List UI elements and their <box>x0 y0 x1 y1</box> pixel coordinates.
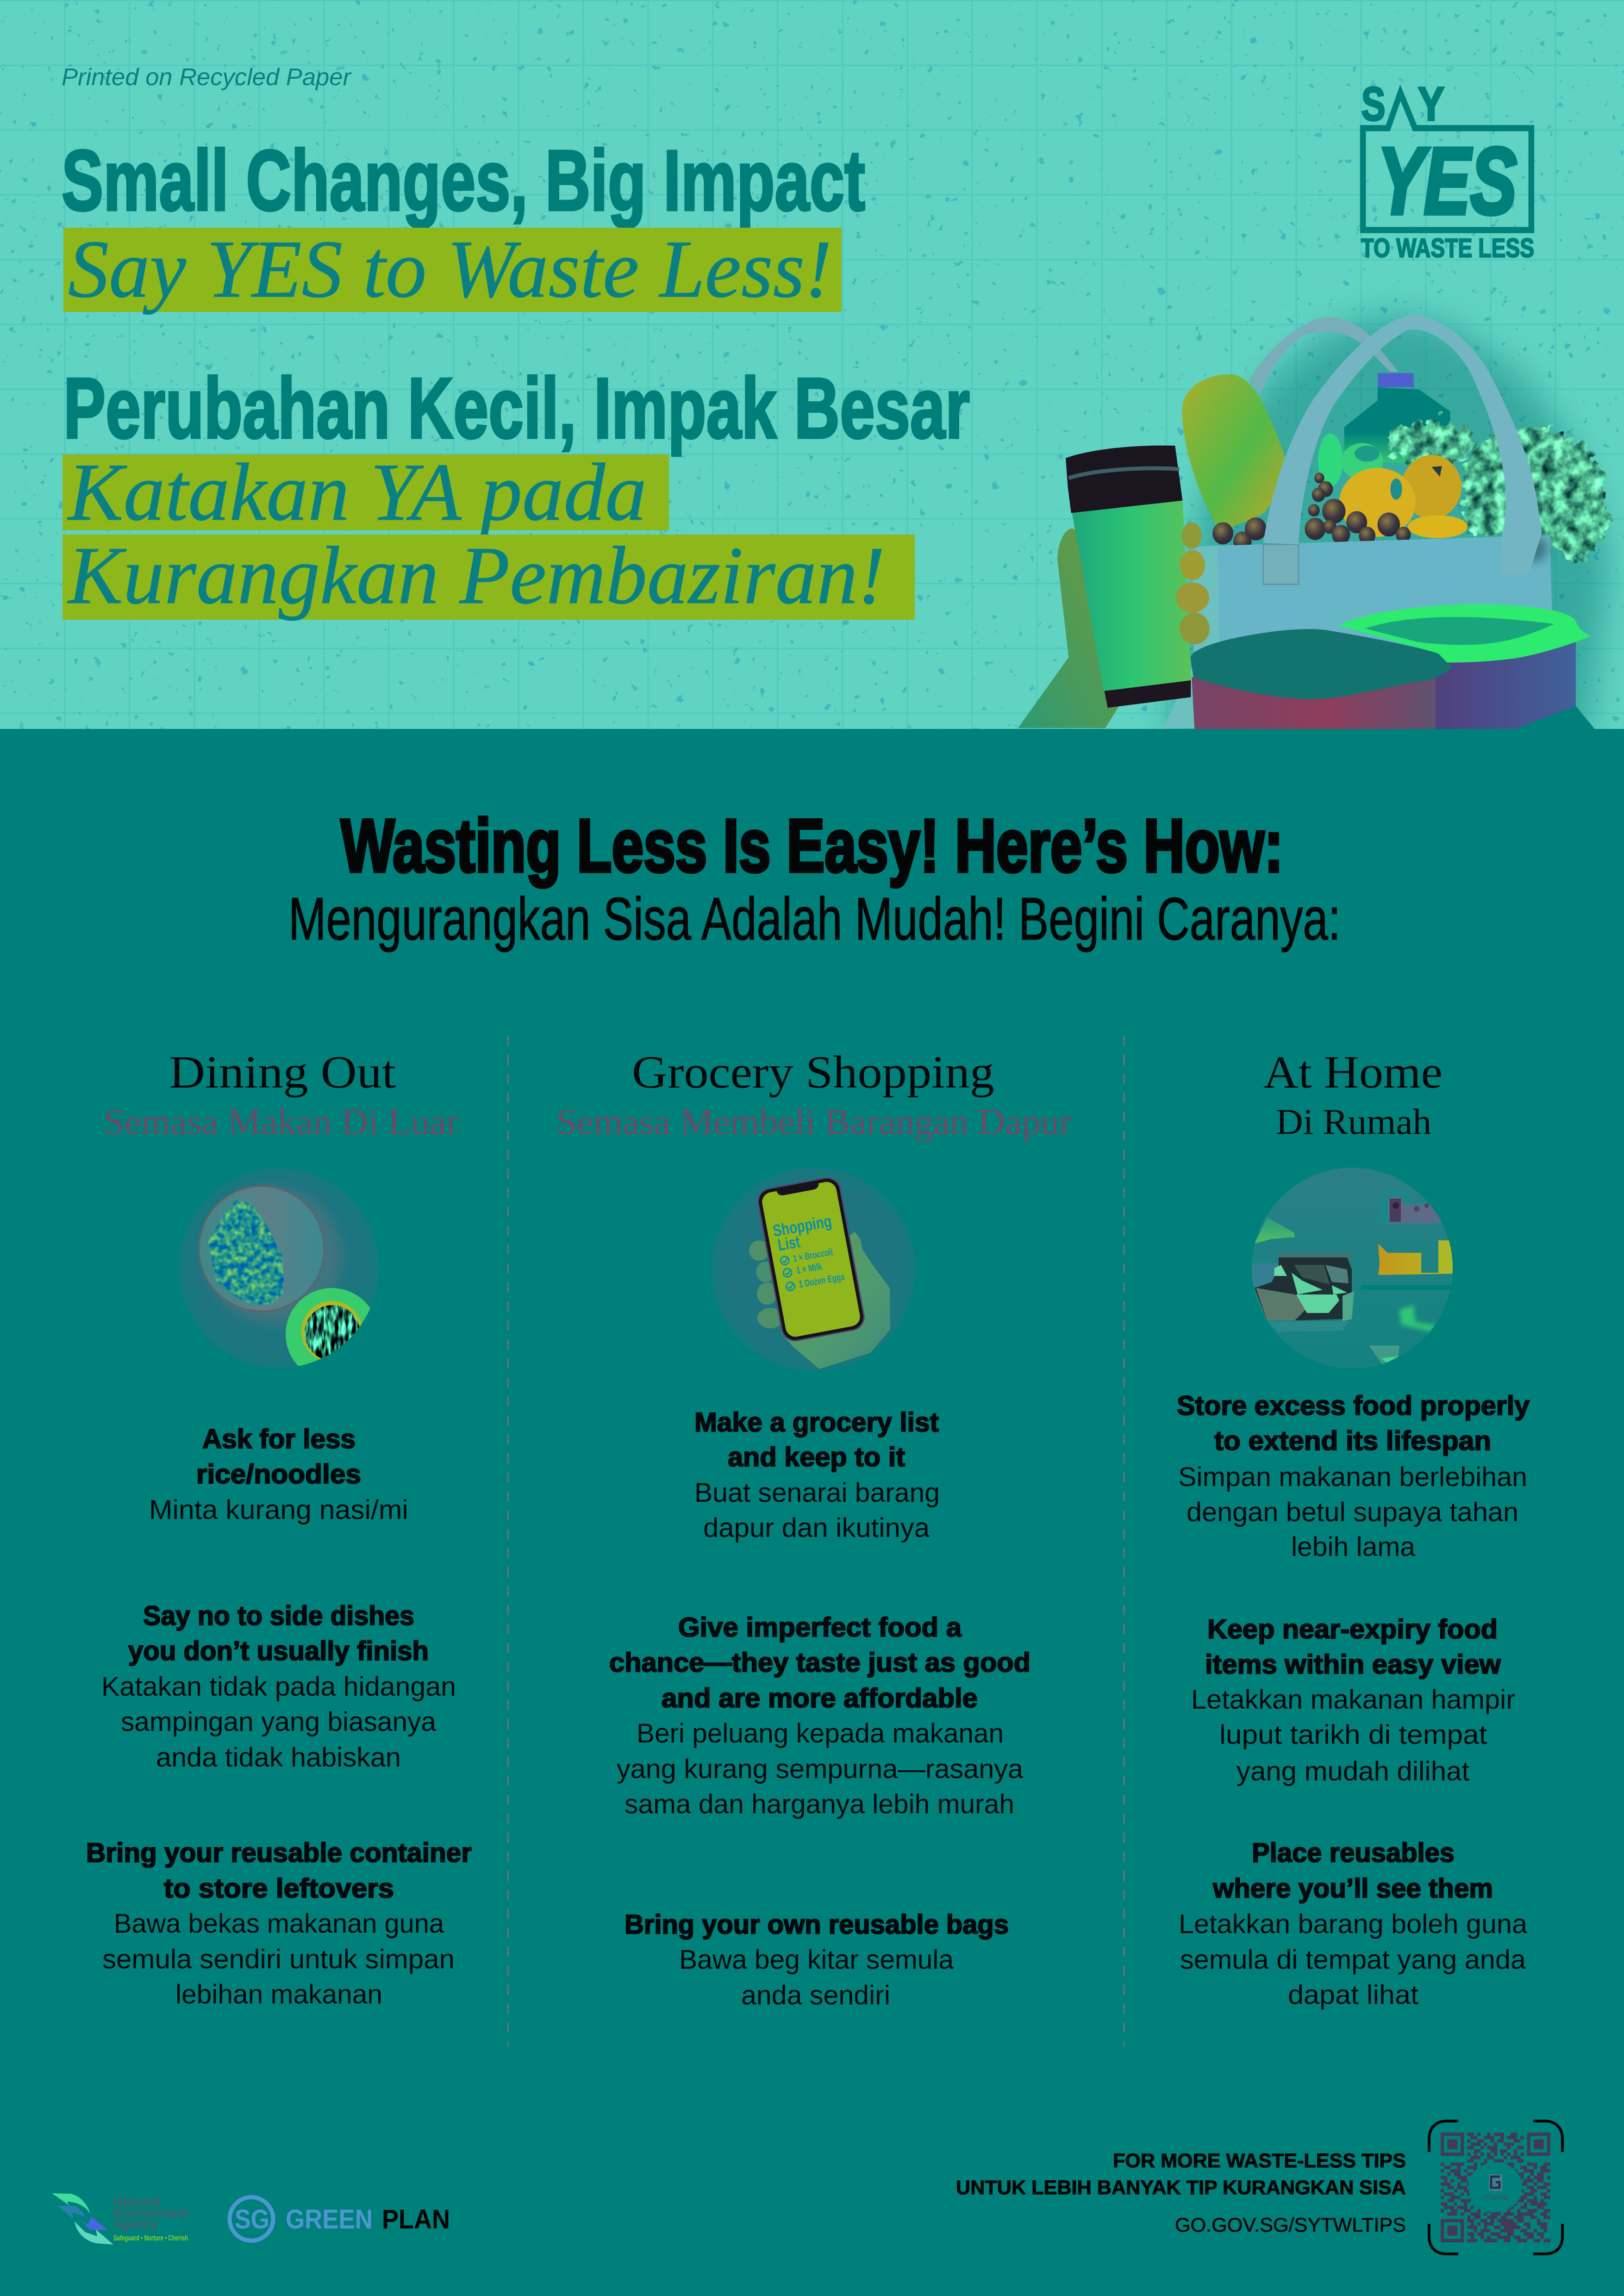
tip: place reusables: semula di tempat yang anda <box>1180 1945 1526 1975</box>
tip: imperfect food: yang kurang sempurna—rasanya <box>617 1754 1024 1784</box>
text: more tips call to action <box>956 2150 1406 2236</box>
tip: near-expiry <box>1191 1614 1515 1786</box>
tip: near-expiry: Letakkan makanan hampir <box>1191 1685 1515 1715</box>
tip: side dishes: Say no to side dishes <box>143 1601 414 1631</box>
logo: National Environment Agency: Agency <box>113 2217 157 2232</box>
panel: top banner background <box>0 0 1624 729</box>
tip: place reusables: Place reusables <box>1252 1838 1455 1868</box>
tip: imperfect food: sama dan harganya lebih murah <box>625 1789 1014 1819</box>
text: more tips call to action: GO.GOV.SG/SYTWLTIPS <box>1175 2214 1406 2236</box>
tip: grocery list <box>694 1407 940 1543</box>
bag body <box>1162 535 1552 728</box>
logo: SG Green Plan <box>230 2197 450 2241</box>
phone body <box>756 1176 866 1343</box>
column subheading: Semasa Membeli Barangan Dapur <box>556 1101 1072 1142</box>
text: more tips call to action: UNTUK LEBIH BANYAK TIP KURANGKAN SISA <box>956 2177 1406 2199</box>
phone screen text: 1 × Milk <box>796 1261 823 1276</box>
tip: place reusables: dapat lihat <box>1288 1980 1418 2010</box>
bread <box>1182 374 1285 532</box>
heading line: Small Changes, Big Impact: Small Changes, Big Impact <box>62 133 865 229</box>
column dividers <box>508 1036 1124 2046</box>
green fruits <box>1318 434 1383 487</box>
logo: National Environment Agency: Environment <box>113 2206 188 2221</box>
icon: fridge with jar <box>1252 1168 1454 1369</box>
tip: store food: dengan betul supaya tahan <box>1187 1497 1518 1527</box>
icon: phone shopping list <box>712 1167 915 1371</box>
tip: near-expiry: yang mudah dilihat <box>1237 1756 1469 1786</box>
tip: grocery list: dapur dan ikutinya <box>703 1513 930 1543</box>
tip: side dishes: you don’t usually finish <box>128 1636 429 1666</box>
tip: place reusables: Letakkan barang boleh guna <box>1179 1909 1528 1939</box>
logo: Say YES to Waste Less: TO WASTE LESS <box>1361 233 1534 263</box>
tip: store food <box>1177 1391 1530 1562</box>
tip: imperfect food: Beri peluang kepada makanan <box>637 1718 1004 1748</box>
logo: Say YES to Waste Less: S <box>1362 77 1386 131</box>
highlight: Katakan YA pada: Katakan YA pada <box>67 446 647 538</box>
tip: reusable container: Bring your reusable container <box>86 1838 472 1868</box>
phone screen text <box>771 1211 845 1293</box>
logo: SG Green Plan: SG <box>235 2204 269 2234</box>
phone screen text: List <box>776 1232 801 1255</box>
tip: store food: to extend its lifespan <box>1214 1426 1491 1456</box>
column heading: Dining Out <box>169 1046 396 1098</box>
heading: Wasting Less Is Easy: Wasting Less Is Easy! Here’s How: <box>341 804 1283 888</box>
fingers <box>1176 522 1210 645</box>
milk jug <box>1344 373 1450 462</box>
QR centre badge: GOgov.sg <box>1483 2193 1508 2200</box>
text: more tips call to action: FOR MORE WASTE-LESS TIPS <box>1113 2150 1406 2172</box>
oranges <box>1339 455 1468 538</box>
tip: imperfect food: chance—they taste just as good <box>609 1648 1031 1678</box>
tip: place reusables <box>1179 1838 1528 2010</box>
bag handle front <box>1263 314 1542 575</box>
tip: reusable container <box>86 1838 472 2010</box>
tip: imperfect food: Give imperfect food a <box>678 1612 962 1643</box>
jar of leaves <box>1255 1252 1354 1321</box>
logo: Say YES to Waste Less: YES <box>1378 128 1517 234</box>
tip: near-expiry: Keep near-expiry food <box>1207 1614 1498 1644</box>
logo: National Environment Agency <box>52 2193 188 2245</box>
bag handle back <box>1249 317 1398 394</box>
phone screen text: Shopping <box>771 1211 833 1240</box>
panel: Grocery Shopping <box>556 1046 1072 2010</box>
panel: At Home <box>1177 1046 1530 2010</box>
tip: near-expiry: luput tarikh di tempat <box>1219 1720 1487 1750</box>
column subheading: Di Rumah <box>1276 1101 1431 1142</box>
tip: ask for less: rice/noodles <box>196 1459 361 1489</box>
tip: imperfect food: and are more affordable <box>662 1683 978 1713</box>
highlight: Kurangkan Pembaziran: Kurangkan Pembaziran! <box>67 529 885 621</box>
tip: reusable bags <box>625 1910 1009 2010</box>
heading: English title <box>62 133 865 315</box>
tip: ask for less: Minta kurang nasi/mi <box>149 1495 408 1525</box>
QR code <box>1429 2121 1562 2254</box>
lettuce <box>1388 420 1610 562</box>
tip: reusable bags: Bawa beg kitar semula <box>679 1945 954 1975</box>
logo: National Environment Agency: Safeguard • Nurture • Cherish <box>113 2234 188 2242</box>
tip: side dishes: anda tidak habiskan <box>156 1742 401 1773</box>
tip: reusable container: to store leftovers <box>164 1873 394 1904</box>
tip: imperfect food <box>609 1612 1031 1819</box>
highlight: Say YES: Say YES to Waste Less! <box>68 223 832 315</box>
tip: side dishes: Katakan tidak pada hidangan <box>101 1672 456 1702</box>
travel cup <box>1066 446 1191 708</box>
tip: store food: Simpan makanan berlebihan <box>1178 1462 1527 1492</box>
logo: SG Green Plan: PLAN <box>382 2204 450 2234</box>
tip: reusable bags: anda sendiri <box>741 1980 890 2010</box>
tip: reusable container: lebihan makanan <box>175 1979 382 2010</box>
heading line: Perubahan Kecil: Perubahan Kecil, Impak Besar <box>63 361 970 456</box>
illustration: reusable bag, cup and containers <box>1018 314 1610 737</box>
heading: Malay title <box>62 361 970 621</box>
tip: store food: Store excess food properly <box>1177 1391 1530 1421</box>
tip: reusable bags: Bring your own reusable bags <box>625 1910 1009 1940</box>
grapes <box>1212 473 1411 551</box>
column subheading: Semasa Makan Di Luar <box>104 1101 459 1142</box>
text: printed on recycled paper: Printed on Recycled Paper <box>62 64 352 91</box>
column heading: Grocery Shopping <box>632 1046 994 1098</box>
tip: near-expiry: items within easy view <box>1205 1649 1501 1680</box>
tip: side dishes <box>101 1601 456 1773</box>
tip: grocery list: Make a grocery list <box>694 1407 939 1437</box>
tip: grocery list: Buat senarai barang <box>694 1478 940 1508</box>
hand <box>1018 529 1122 728</box>
tip: reusable container: Bawa bekas makanan guna <box>114 1909 444 1939</box>
logo: Say YES to Waste Less: Y <box>1418 77 1444 131</box>
tip: ask for less: Ask for less <box>202 1424 356 1454</box>
logo: SG Green Plan: GREEN <box>286 2204 373 2234</box>
tip: ask for less <box>149 1424 408 1525</box>
phone screen text: 1 Dozen Eggs <box>798 1271 845 1290</box>
tip: place reusables: where you’ll see them <box>1212 1873 1493 1904</box>
phone screen text: 1 × Broccoli <box>792 1247 834 1264</box>
holding hand <box>749 1232 890 1369</box>
tip: store food: lebih lama <box>1291 1532 1416 1562</box>
logo: Say YES to Waste Less <box>1361 77 1534 263</box>
column heading: At Home <box>1263 1046 1443 1098</box>
containers <box>1190 604 1596 730</box>
logo: National Environment Agency: National <box>113 2195 161 2209</box>
panel: Dining Out <box>86 1046 472 2010</box>
tip: reusable container: semula sendiri untuk simpan <box>102 1944 455 1974</box>
tip: side dishes: sampingan yang biasanya <box>121 1707 437 1737</box>
panel: lower section background <box>0 729 1624 2296</box>
tip: grocery list: and keep to it <box>728 1442 905 1472</box>
icon: plates of food <box>179 1168 379 1381</box>
QR centre badge <box>1468 2162 1522 2212</box>
